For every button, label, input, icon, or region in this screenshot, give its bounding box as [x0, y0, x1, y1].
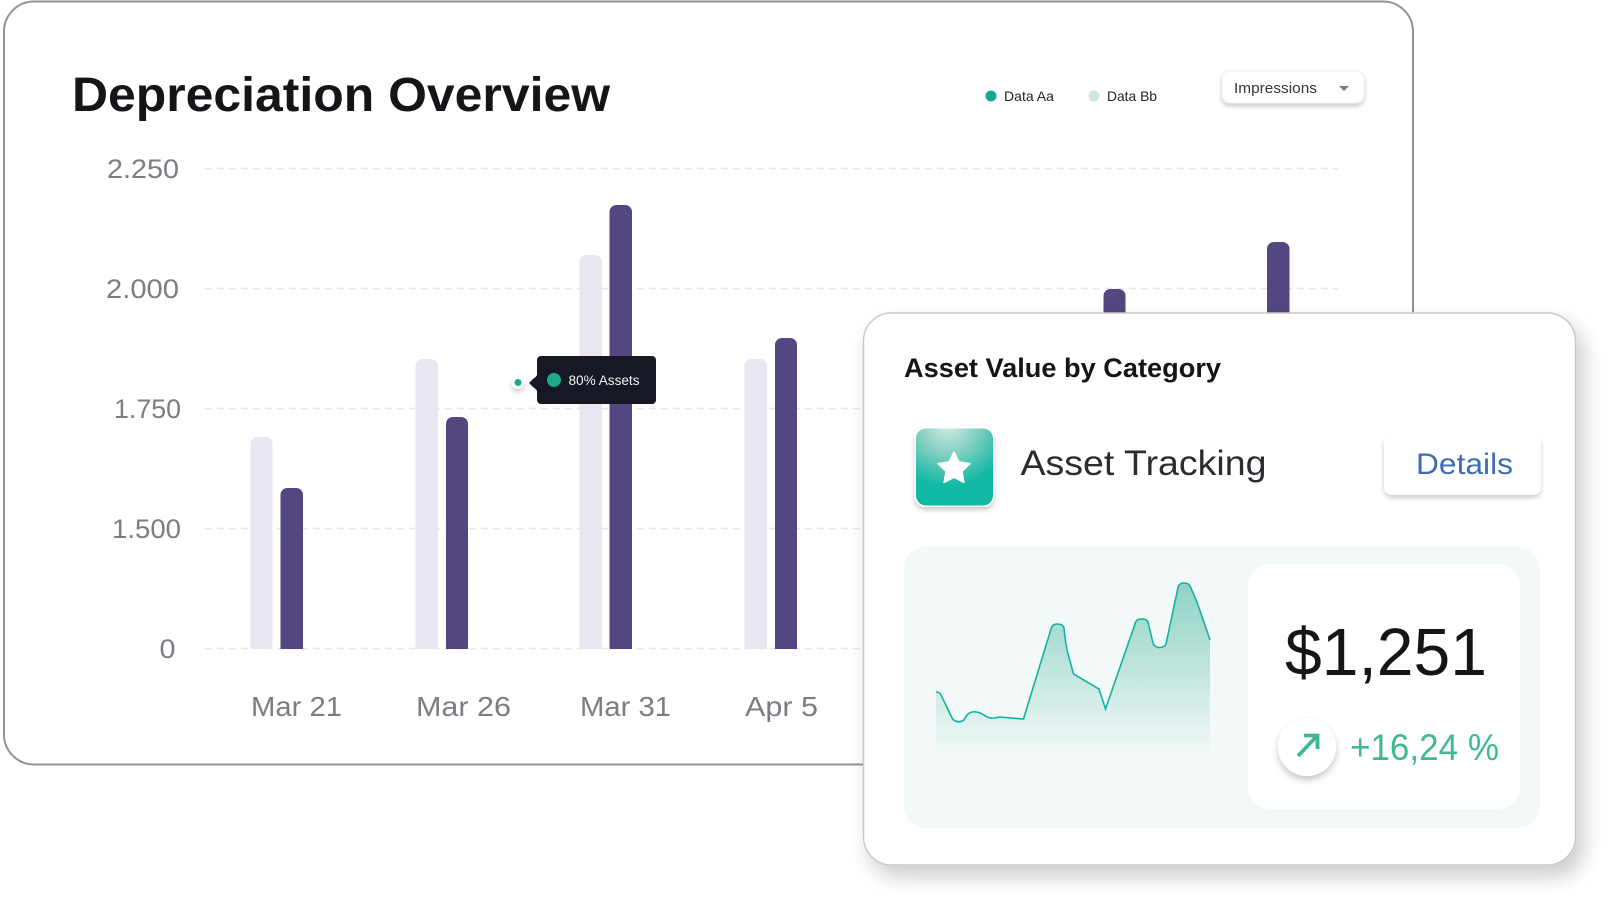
bars: Data Bb light: [250, 255, 767, 649]
dropdown: impressions: Impressions: [1234, 81, 1317, 97]
tooltip: 80% assets: 80% Assets: [568, 373, 640, 388]
y axis labels and grid lines: 0: [160, 634, 176, 664]
x axis labels: [251, 691, 818, 722]
y axis labels and grid lines: 1.750: [114, 394, 181, 424]
chart: bar chart: [106, 154, 1338, 722]
y axis labels and grid lines: 2.000: [106, 274, 179, 304]
value: percent change: +16,24 %: [1350, 727, 1499, 768]
chart: area sparkline: [936, 583, 1210, 757]
panel: trend and value: [904, 547, 1540, 828]
marker dot: [512, 376, 524, 389]
dropdown: impressions: [1222, 71, 1364, 103]
icon: up arrow: [1278, 718, 1336, 776]
value: $1,251: $1,251: [1285, 615, 1487, 690]
button: details: Details: [1416, 448, 1513, 481]
x axis labels: Apr 5: [745, 691, 818, 722]
legend: Data Aa: [1004, 88, 1054, 104]
stat card: [1248, 564, 1520, 809]
icon: star badge: [914, 427, 994, 507]
heading: asset value by category: Asset Value by Category: [904, 353, 1221, 383]
legend: [986, 88, 1157, 104]
heading: depreciation overview: Depreciation Overview: [72, 69, 611, 122]
bars: Data Aa dark: [280, 205, 1290, 649]
y axis labels and grid lines: [106, 154, 1338, 664]
legend: Data Bb: [1107, 88, 1157, 104]
panel: asset value by category: [864, 313, 1576, 865]
y axis labels and grid lines: 1.500: [112, 514, 181, 544]
y axis labels and grid lines: 2.250: [107, 154, 179, 184]
label: asset tracking: Asset Tracking: [1020, 443, 1266, 483]
x axis labels: Mar 26: [416, 691, 511, 722]
button: details: [1384, 434, 1541, 495]
tooltip: 80% assets: [529, 356, 656, 404]
x axis labels: Mar 31: [580, 691, 671, 722]
x axis labels: Mar 21: [251, 691, 342, 722]
panel: depreciation overview: [4, 2, 1413, 764]
